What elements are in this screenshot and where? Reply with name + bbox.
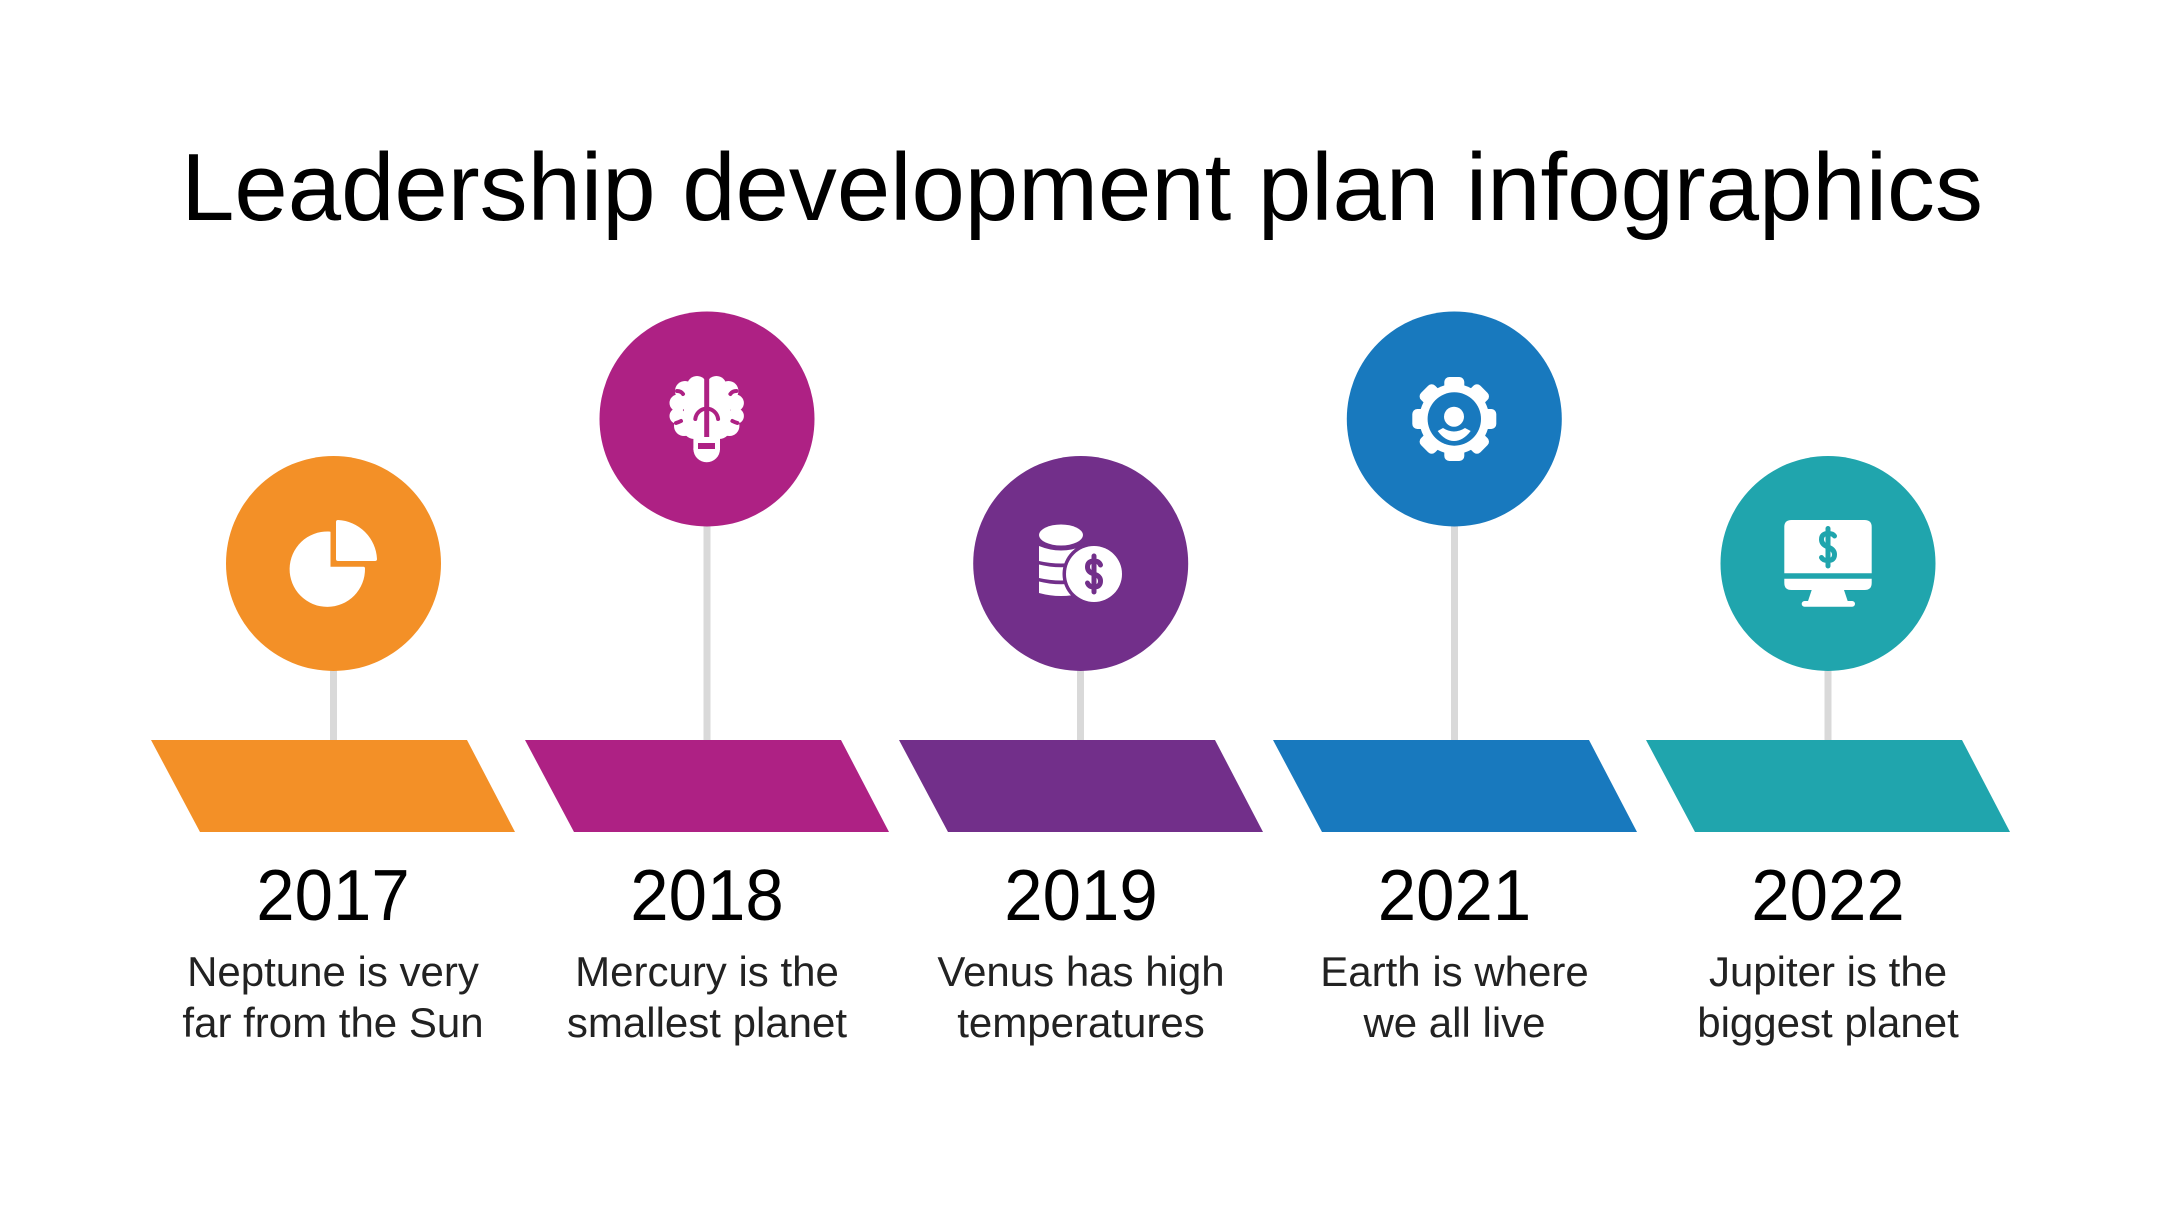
icon: coins with dollar xyxy=(1039,524,1126,606)
circle xyxy=(973,456,1188,671)
panel: 2017 xyxy=(151,456,515,1046)
description: Venus has high xyxy=(937,948,1225,995)
circle xyxy=(226,456,441,671)
connector stem xyxy=(704,515,710,742)
year: 2019 xyxy=(1004,856,1158,936)
circle xyxy=(1720,456,1936,671)
connector stem xyxy=(330,660,337,742)
description: we all live xyxy=(1362,999,1546,1046)
icon: brain lightbulb xyxy=(670,375,744,462)
description: far from the Sun xyxy=(182,999,484,1046)
year: 2021 xyxy=(1378,856,1531,936)
year: 2022 xyxy=(1751,856,1905,936)
year: 2017 xyxy=(256,856,410,936)
description: biggest planet xyxy=(1697,999,1959,1046)
icon: gear with person xyxy=(1412,377,1496,461)
connector stem xyxy=(1077,660,1084,742)
icon: monitor with dollar xyxy=(1784,520,1872,607)
parallelogram band xyxy=(525,740,889,832)
parallelogram band xyxy=(1273,740,1637,832)
description: Mercury is the xyxy=(575,948,839,995)
parallelogram band xyxy=(151,740,515,832)
description: smallest planet xyxy=(567,999,847,1046)
icon: pie chart xyxy=(290,520,377,607)
panel: 2018 xyxy=(525,312,889,1046)
title: Leadership development plan infographics xyxy=(181,134,1983,241)
description: Earth is where xyxy=(1320,948,1589,995)
description: temperatures xyxy=(957,999,1205,1046)
description: Neptune is very xyxy=(187,948,479,995)
description: Jupiter is the xyxy=(1709,948,1947,995)
parallelogram band xyxy=(899,740,1263,832)
connector stem xyxy=(1824,660,1832,742)
circle xyxy=(600,312,814,526)
panel: 2022 xyxy=(1646,456,2010,1046)
panel: 2019 xyxy=(899,456,1263,1046)
year: 2018 xyxy=(630,856,784,936)
circle xyxy=(1347,312,1562,526)
connector stem xyxy=(1451,515,1458,742)
panel: 2021 xyxy=(1273,312,1637,1046)
parallelogram band xyxy=(1646,740,2010,832)
